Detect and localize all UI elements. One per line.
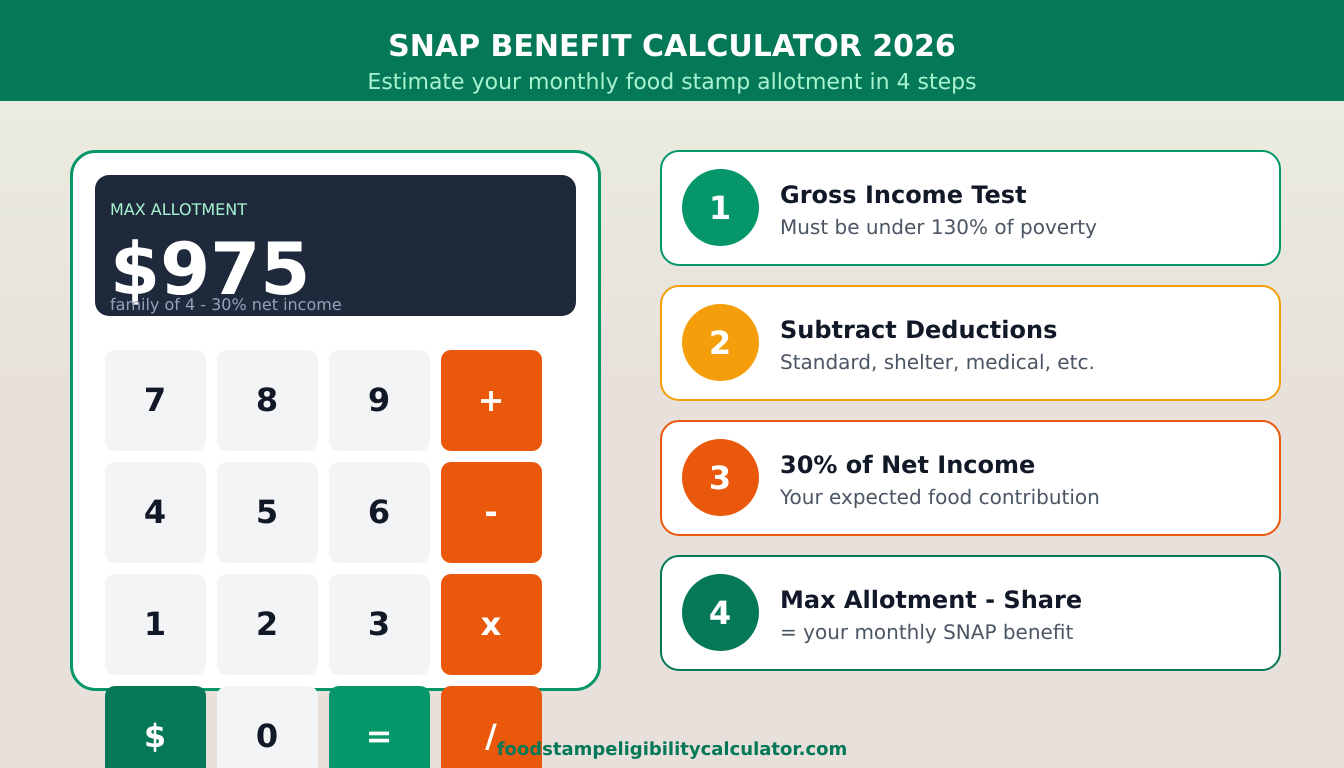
key divide: /: [485, 717, 497, 755]
key divide: [441, 686, 542, 768]
step 3 description: Your expected food contribution: [779, 485, 1100, 509]
key 3: [329, 574, 430, 675]
key 2: [217, 574, 318, 675]
panel: step 2: [661, 286, 1280, 400]
panel: calculator: [72, 152, 600, 768]
panel: step 3: [661, 421, 1280, 535]
display label: MAX ALLOTMENT: [110, 200, 247, 219]
step 1 badge: 1: [709, 189, 731, 227]
key dollar: [105, 686, 206, 768]
step 2 heading: Subtract Deductions: [780, 316, 1057, 344]
step 4 heading: Max Allotment - Share: [780, 586, 1082, 614]
step 2 badge: [682, 304, 759, 381]
key 9: [329, 350, 430, 451]
calculator body: [72, 152, 600, 690]
step 3 badge: 3: [709, 459, 731, 497]
key 9: 9: [368, 381, 390, 419]
title: SNAP BENEFIT CALCULATOR 2026: [388, 29, 956, 64]
calculator display: [95, 175, 576, 316]
footer url: foodstampeligibilitycalculator.com: [497, 739, 847, 760]
key 7: 7: [144, 381, 166, 419]
key 8: [217, 350, 318, 451]
step 4 badge: [682, 574, 759, 651]
key 4: 4: [144, 493, 166, 531]
key 1: 1: [144, 605, 166, 643]
step 3 badge: [682, 439, 759, 516]
key equals: =: [366, 717, 392, 755]
step 4 badge: 4: [709, 594, 731, 632]
key 0: 0: [256, 717, 278, 755]
step 2 badge: 2: [709, 324, 731, 362]
key 0: [217, 686, 318, 768]
header band: [0, 0, 1344, 101]
step 1 badge: [682, 169, 759, 246]
step 1 heading: Gross Income Test: [780, 181, 1027, 209]
display caption: family of 4 - 30% net income: [110, 295, 342, 314]
step 1 description: Must be under 130% of poverty: [780, 215, 1097, 239]
key 5: 5: [256, 493, 278, 531]
step 4 description: = your monthly SNAP benefit: [780, 620, 1073, 644]
key 3: 3: [368, 605, 390, 643]
panel: step 4: [661, 556, 1280, 670]
key plus: +: [478, 381, 504, 419]
key 1: [105, 574, 206, 675]
key plus: [441, 350, 542, 451]
panel: step 1: [661, 151, 1280, 265]
key 4: [105, 462, 206, 563]
display amount: $975: [110, 227, 310, 311]
step 2 description: Standard, shelter, medical, etc.: [780, 350, 1095, 374]
key times: x: [481, 605, 502, 643]
key 6: 6: [368, 493, 390, 531]
step 3 heading: 30% of Net Income: [780, 451, 1035, 479]
keypad: [105, 350, 542, 768]
key 7: [105, 350, 206, 451]
key times: [441, 574, 542, 675]
key 6: [329, 462, 430, 563]
key minus: [441, 462, 542, 563]
key minus: -: [484, 493, 498, 531]
subtitle: Estimate your monthly food stamp allotment in 4 steps: [367, 70, 977, 95]
key 2: 2: [256, 605, 278, 643]
key equals: [329, 686, 430, 768]
key dollar: $: [144, 717, 166, 755]
key 8: 8: [256, 381, 278, 419]
key 5: [217, 462, 318, 563]
